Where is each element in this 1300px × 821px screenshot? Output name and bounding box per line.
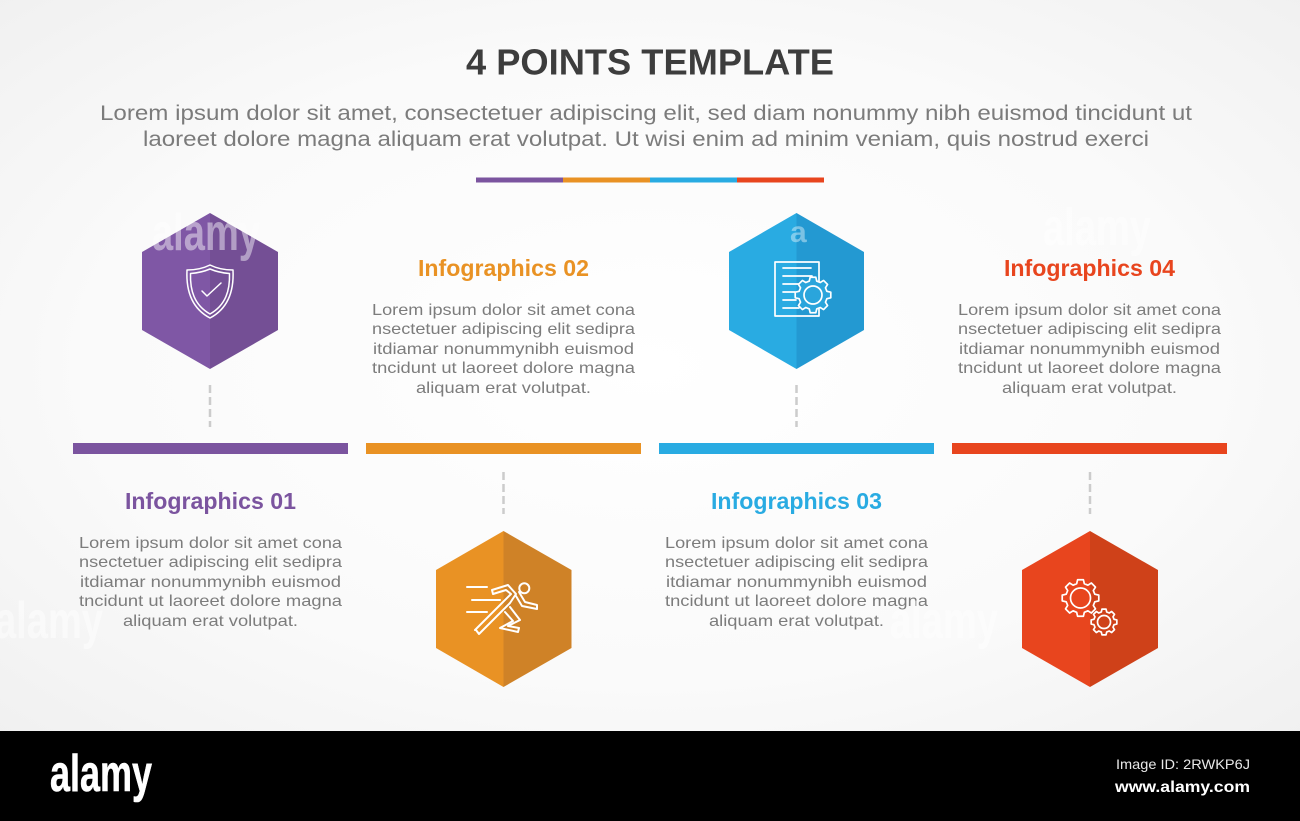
hexagon: orange bbox=[436, 531, 572, 687]
text block: itdiamar nonummynibh euismod bbox=[373, 341, 634, 358]
text block: aliquam erat volutpat. bbox=[123, 613, 298, 630]
heading: Infographics 03 bbox=[711, 488, 882, 514]
connector bbox=[502, 472, 505, 514]
bar bbox=[366, 443, 641, 454]
connector bbox=[209, 385, 211, 427]
watermarks: a bbox=[790, 216, 807, 249]
intro text: Lorem ipsum dolor sit amet, consectetuer adipiscing elit, sed diam nonummy nibh euismod tincidunt ut bbox=[100, 101, 1192, 125]
watermarks bbox=[0, 199, 1151, 650]
heading: Infographics 04 bbox=[1004, 255, 1175, 281]
text block: itdiamar nonummynibh euismod bbox=[959, 341, 1220, 358]
text block bbox=[665, 535, 928, 630]
bar bbox=[952, 443, 1227, 454]
image id: Image ID: 2RWKP6J bbox=[1116, 756, 1250, 772]
icon: gears bbox=[1062, 580, 1117, 635]
bar bbox=[659, 443, 934, 454]
text block bbox=[79, 535, 342, 630]
intro text bbox=[100, 101, 1192, 151]
text block bbox=[372, 302, 635, 397]
text block: nsectetuer adipiscing elit sedipra bbox=[79, 554, 342, 571]
text block: Lorem ipsum dolor sit amet cona bbox=[665, 535, 928, 552]
hexagon: red bbox=[1022, 531, 1158, 687]
heading: Infographics 01 bbox=[125, 488, 296, 514]
text block bbox=[958, 302, 1221, 397]
text block: tncidunt ut laoreet dolore magna bbox=[372, 360, 635, 377]
title: 4 POINTS TEMPLATE bbox=[466, 42, 834, 82]
point 03 bbox=[659, 213, 934, 630]
text block: Lorem ipsum dolor sit amet cona bbox=[958, 302, 1221, 319]
bar bbox=[73, 443, 348, 454]
text block: nsectetuer adipiscing elit sedipra bbox=[372, 321, 635, 338]
footer logo: alamy bbox=[50, 745, 152, 803]
text block: itdiamar nonummynibh euismod bbox=[80, 574, 341, 591]
point 02 bbox=[366, 255, 641, 687]
text block: nsectetuer adipiscing elit sedipra bbox=[958, 321, 1221, 338]
title divider: four colours bbox=[476, 178, 824, 182]
website: www.alamy.com bbox=[1114, 779, 1250, 796]
text block: tncidunt ut laoreet dolore magna bbox=[665, 593, 928, 610]
text block: aliquam erat volutpat. bbox=[1002, 380, 1177, 397]
hexagon: blue bbox=[729, 213, 864, 369]
connector bbox=[1089, 472, 1091, 514]
point 01 bbox=[73, 213, 348, 630]
heading: Infographics 02 bbox=[418, 255, 589, 281]
icon: document with gear bbox=[775, 262, 831, 316]
text block: Lorem ipsum dolor sit amet cona bbox=[372, 302, 635, 319]
icon: runner bbox=[467, 583, 537, 634]
connector bbox=[795, 385, 798, 427]
watermarks: alamy bbox=[890, 592, 998, 650]
text block: tncidunt ut laoreet dolore magna bbox=[79, 593, 342, 610]
watermarks: alamy bbox=[1043, 199, 1151, 257]
intro text: laoreet dolore magna aliquam erat volutpat. Ut wisi enim ad minim veniam, quis nostrud exerci bbox=[143, 127, 1149, 151]
hexagon: purple bbox=[142, 213, 278, 369]
text block: aliquam erat volutpat. bbox=[709, 613, 884, 630]
icon: shield bbox=[187, 265, 233, 318]
watermarks: alamy bbox=[152, 204, 260, 262]
text block: Lorem ipsum dolor sit amet cona bbox=[79, 535, 342, 552]
text block: itdiamar nonummynibh euismod bbox=[666, 574, 927, 591]
text block: nsectetuer adipiscing elit sedipra bbox=[665, 554, 928, 571]
text block: aliquam erat volutpat. bbox=[416, 380, 591, 397]
text block: tncidunt ut laoreet dolore magna bbox=[958, 360, 1221, 377]
point 04 bbox=[952, 255, 1227, 687]
footer band bbox=[0, 731, 1300, 821]
